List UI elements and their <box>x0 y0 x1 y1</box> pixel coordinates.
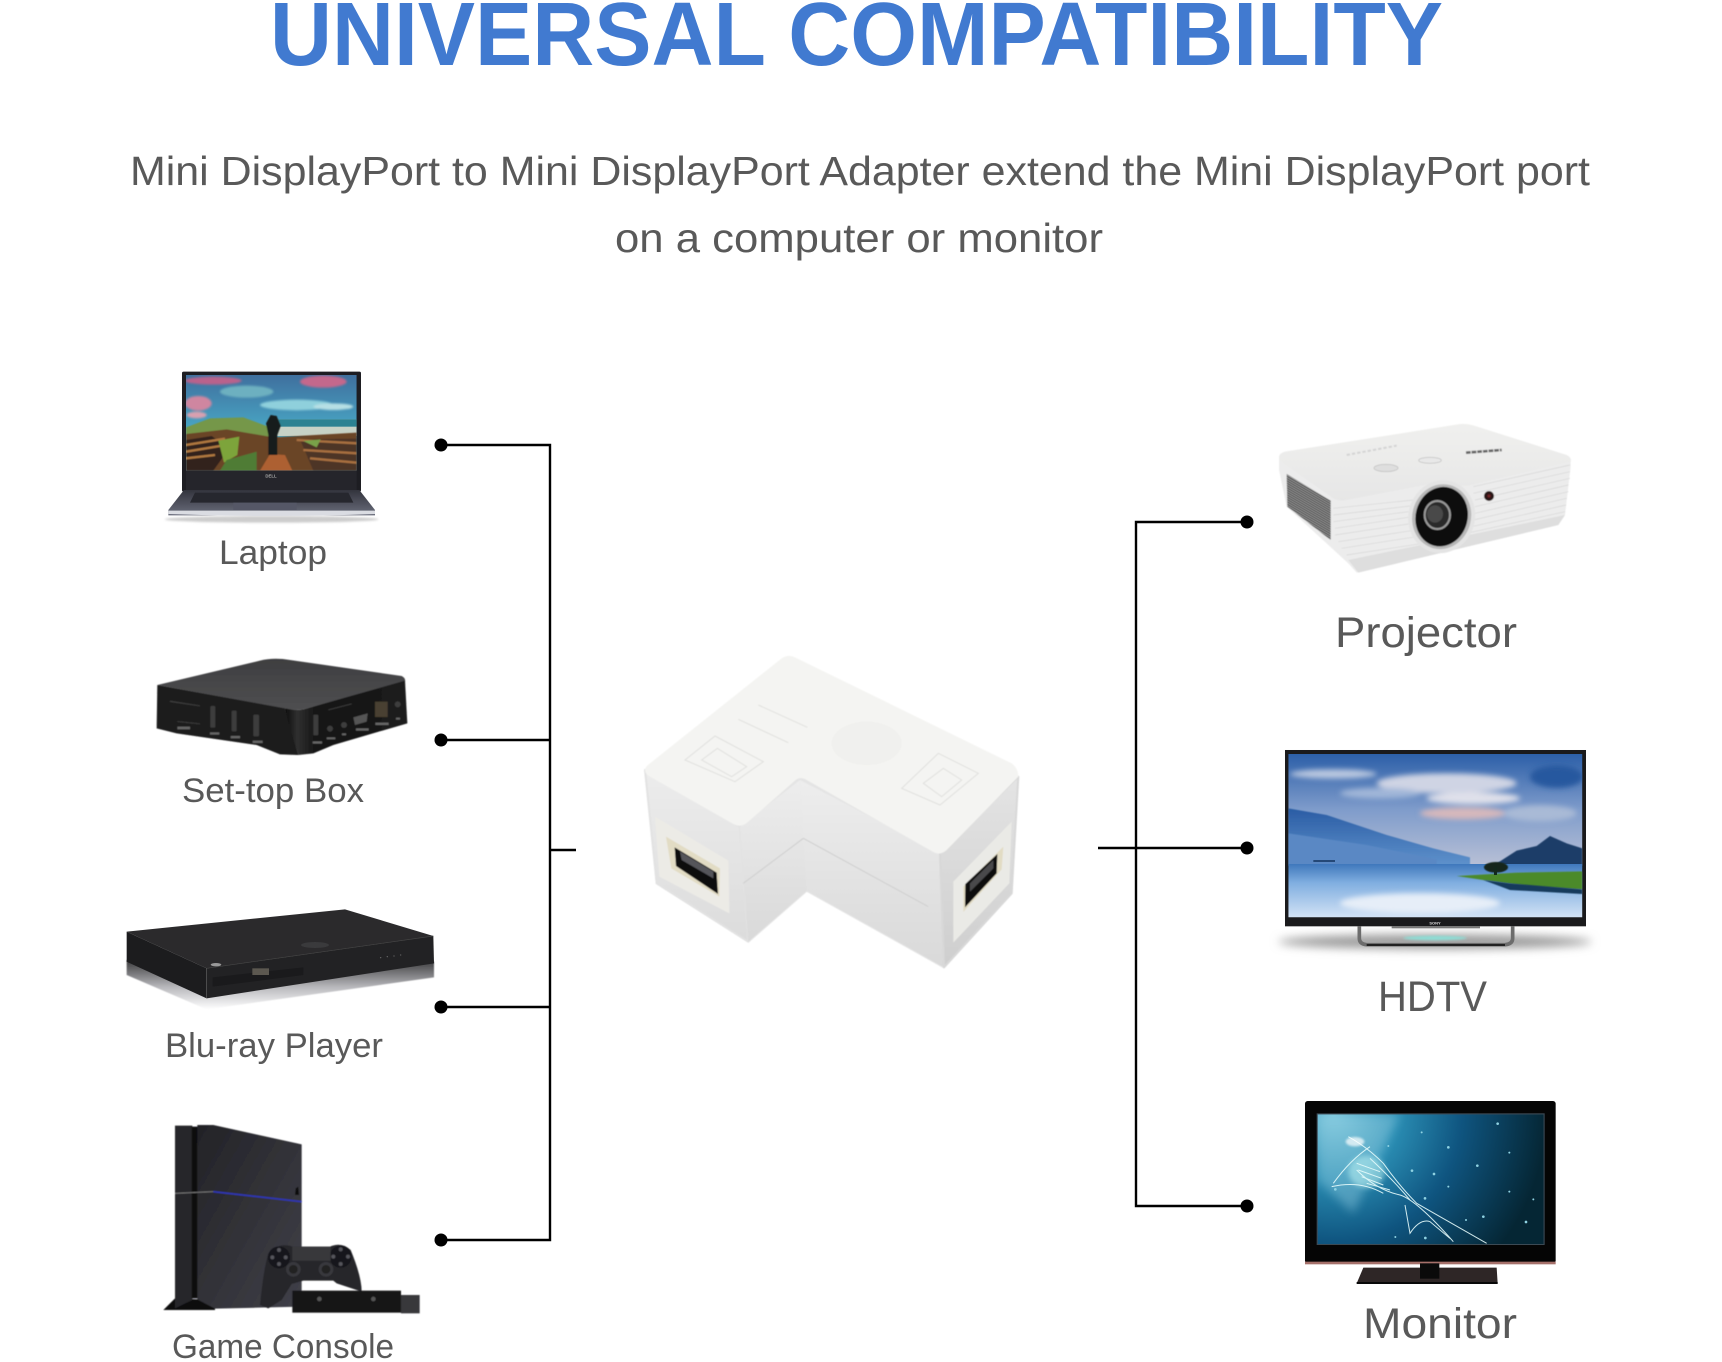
label: hdtv: HDTV <box>1378 973 1487 1021</box>
icon: set-top box <box>157 659 407 755</box>
icon: blu-ray player <box>127 909 434 1009</box>
icon: adapter <box>645 656 1018 967</box>
label: set-top box: Set-top Box <box>182 772 364 810</box>
subtitle: Mini DisplayPort to Mini DisplayPort Adapter extend the Mini DisplayPort port <box>130 148 1591 194</box>
label: monitor: Monitor <box>1363 1300 1517 1348</box>
icon: hdtv <box>1278 750 1592 949</box>
label: projector: Projector <box>1335 609 1517 657</box>
subtitle <box>130 148 1591 261</box>
subtitle: on a computer or monitor <box>615 215 1103 261</box>
icon: monitor <box>1305 1101 1556 1284</box>
icon: hdtv: SONY <box>1429 921 1441 926</box>
icon: projector <box>1279 424 1571 573</box>
icon: laptop <box>165 372 378 523</box>
label: blu-ray player: Blu-ray Player <box>165 1027 383 1065</box>
icon: game console <box>163 1125 420 1313</box>
left connector lines <box>434 438 576 1246</box>
icon: laptop: DELL <box>265 473 277 478</box>
right connector lines <box>1098 516 1254 1212</box>
label: laptop: Laptop <box>219 534 327 572</box>
